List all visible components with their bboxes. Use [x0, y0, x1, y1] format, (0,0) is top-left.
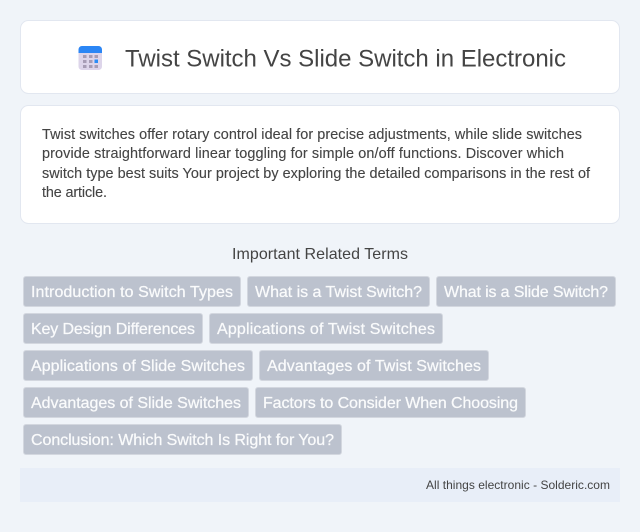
footer — [20, 468, 620, 502]
tag: key design — [24, 314, 202, 344]
tag: what is slide — [436, 276, 616, 306]
tag: what is twist: What is a Twist Switch? — [255, 284, 422, 301]
tag: what is twist — [248, 276, 430, 306]
tag: applications twist: Applications of Twist Switches — [217, 321, 435, 338]
description text: Twist switches offer rotary control ideal for precise adjustments, while slide switches — [42, 127, 582, 143]
title: Twist Switch Vs Slide Switch in Electronic — [125, 46, 566, 72]
tag: what is slide: What is a Slide Switch? — [444, 284, 608, 301]
footer text: All things electronic - Solderic.com — [426, 478, 610, 492]
tag: advantages slide — [24, 388, 248, 418]
tag: advantages slide: Advantages of Slide Switches — [31, 395, 241, 412]
tag: factors: Factors to Consider When Choosing — [263, 395, 518, 412]
tag: advantages twist: Advantages of Twist Switches — [267, 358, 481, 375]
tag: introduction: Introduction to Switch Types — [31, 284, 233, 301]
description text: provide straightforward linear toggling for simple on/off functions. Discover which — [42, 146, 564, 162]
tag: introduction — [24, 276, 240, 306]
heading: related terms: Important Related Terms — [232, 246, 408, 263]
tag: conclusion — [24, 424, 342, 454]
header panel — [20, 20, 620, 94]
description text: the article. — [42, 185, 107, 201]
description text — [42, 127, 591, 201]
tag list — [24, 276, 616, 454]
tag: applications slide: Applications of Slide Switches — [31, 358, 245, 375]
tag: key design: Key Design Differences — [31, 321, 195, 338]
panel: description — [20, 106, 620, 224]
tag: applications twist — [210, 314, 442, 344]
description text: switch type best suits Your project by exploring the detailed comparisons in the rest of — [42, 166, 591, 182]
tag: advantages twist — [260, 350, 488, 380]
tag: applications slide — [24, 350, 252, 380]
icon: calendar — [78, 46, 102, 70]
tag: conclusion: Conclusion: Which Switch Is Right for You? — [31, 432, 334, 449]
tag: factors — [256, 388, 526, 418]
